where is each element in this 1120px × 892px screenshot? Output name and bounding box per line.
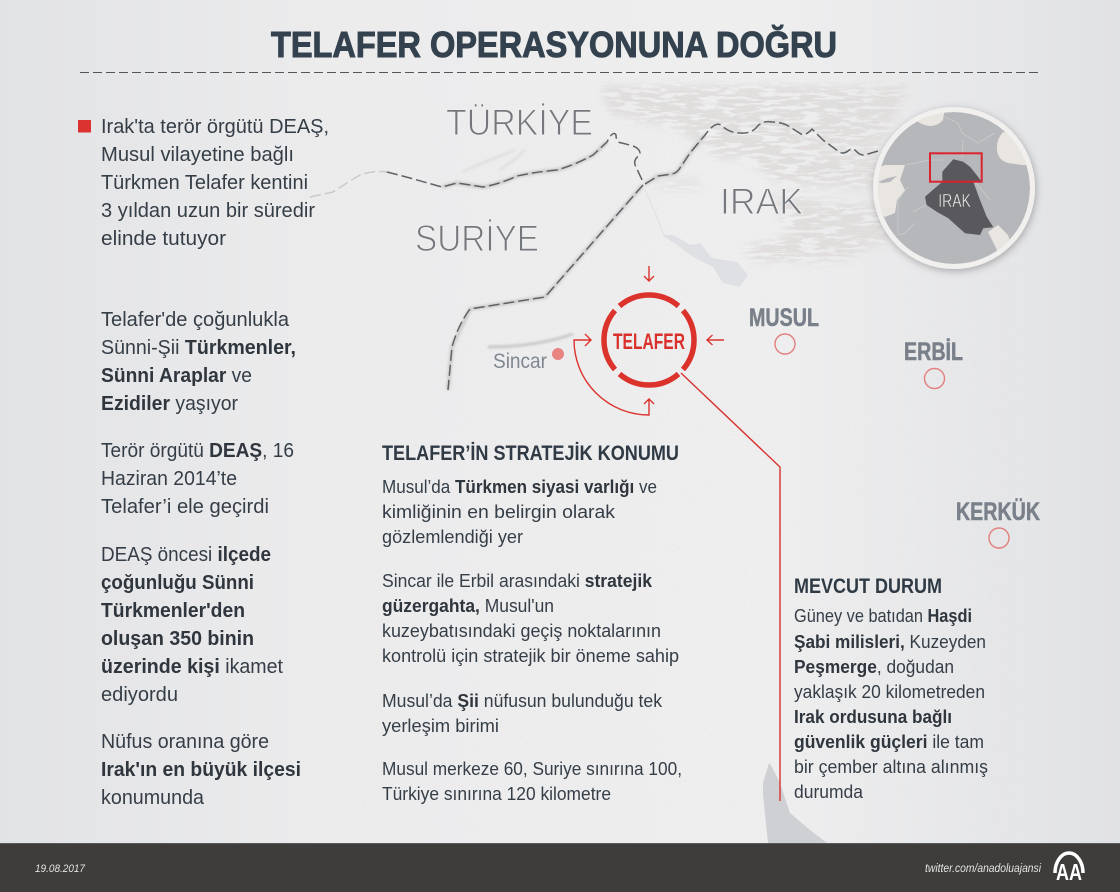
body: bir çember altına alınmış (794, 757, 988, 777)
point 1 (382, 477, 657, 547)
label: Telafer: TELAFER (613, 329, 685, 354)
text block: intro: elinde tutuyor (101, 228, 226, 250)
text block: capture date (101, 440, 294, 518)
text block: intro: 3 yıldan uzun bir süredir (101, 200, 315, 222)
heading: TELAFER’İN STRATEJİK KONUMU (382, 442, 679, 465)
point 2: güzergahta, Musul'un (382, 596, 554, 616)
text block: largest district: Irak'ın en büyük ilçesi (101, 759, 301, 781)
point 1: Musul’da Türkmen siyasi varlığı ve (382, 477, 657, 497)
city: Musul (749, 304, 819, 354)
map: terrain background (310, 85, 1020, 843)
text block: population: Telafer'de çoğunlukla (101, 309, 290, 331)
point 1: kimliğinin en belirgin olarak (382, 502, 616, 522)
text block: pre-DEAŞ population (101, 544, 283, 706)
city: Musul: MUSUL (749, 304, 819, 332)
point 4: Musul merkeze 60, Suriye sınırına 100, (382, 759, 682, 779)
text block: intro: Musul vilayetine bağlı (101, 144, 294, 166)
arrows (574, 266, 724, 415)
icon: Anadolu Agency logo: AA (1056, 859, 1082, 885)
locator rectangle (930, 153, 982, 182)
seas (878, 113, 1026, 250)
inset borders (898, 116, 995, 235)
text block: capture date: Haziran 2014’te (101, 468, 237, 490)
point 1: gözlemlendiği yer (382, 527, 523, 547)
text block: population: Ezidiler yaşıyor (101, 393, 238, 415)
date: 19.08.2017 (35, 863, 86, 875)
map labels: countries: TÜRKİYE (446, 102, 593, 143)
city: Kerkük (956, 497, 1040, 548)
connector line (681, 373, 780, 801)
text block: largest district: Nüfus oranına göre (101, 731, 269, 753)
icon: Anadolu Agency logo (1055, 853, 1083, 885)
borders (310, 122, 878, 390)
footer (0, 843, 1120, 892)
map labels: countries: IRAK (720, 181, 803, 222)
bullet (78, 120, 91, 132)
label: Irak: IRAK (938, 191, 971, 211)
city: Erbil (904, 338, 963, 388)
text block: intro (101, 116, 329, 250)
point 3: Musul’da Şii nüfusun bulunduğu tek (382, 691, 663, 711)
ring (604, 295, 694, 385)
text block: pre-DEAŞ population: üzerinde kişi ikamet (101, 656, 283, 678)
text block: largest district (101, 731, 301, 809)
body: Irak ordusuna bağlı (794, 707, 952, 727)
border shadows (442, 135, 705, 390)
social handle: twitter.com/anadoluajansi (925, 863, 1041, 875)
text block: pre-DEAŞ population: DEAŞ öncesi ilçede (101, 544, 271, 566)
text block: pre-DEAŞ population: çoğunluğu Sünni (101, 572, 254, 594)
text block: pre-DEAŞ population: oluşan 350 binin (101, 628, 254, 650)
point 2: Sincar ile Erbil arasındaki stratejik (382, 571, 653, 591)
body (794, 606, 988, 802)
panel: strategic location (382, 442, 682, 804)
city: Erbil: ERBİL (904, 338, 963, 366)
Cyprus (878, 176, 897, 183)
body: yaklaşık 20 kilometreden (794, 682, 985, 702)
panel: current situation (794, 575, 988, 802)
ridge streaks (462, 150, 573, 347)
point 3: yerleşim birimi (382, 716, 499, 736)
body: Peşmerge, doğudan (794, 657, 954, 677)
text block: largest district: konumunda (101, 787, 205, 809)
text block: population (101, 309, 296, 415)
heading: MEVCUT DURUM (794, 575, 942, 598)
map labels: countries (415, 102, 803, 259)
text block: population: Sünni-Şii Türkmenler, (101, 337, 296, 359)
text block: pre-DEAŞ population: Türkmenler'den (101, 600, 245, 622)
point 4: Türkiye sınırına 120 kilometre (382, 784, 611, 804)
point 4 (382, 759, 682, 804)
Iraq (925, 159, 993, 235)
body: Güney ve batıdan Haşdi (794, 606, 972, 626)
point 2: kontrolü için stratejik bir öneme sahip (382, 646, 679, 666)
body: güvenlik güçleri ile tam (794, 732, 984, 752)
city: Kerkük: KERKÜK (956, 497, 1040, 526)
body: Şabi milisleri, Kuzeyden (794, 632, 986, 652)
text block: pre-DEAŞ population: ediyordu (101, 684, 178, 706)
text block: capture date: Terör örgütü DEAŞ, 16 (101, 440, 294, 462)
body: durumda (794, 782, 864, 802)
map labels: countries: SURİYE (415, 218, 539, 259)
Telafer siege marker (574, 266, 724, 415)
text block: intro: Irak'ta terör örgütü DEAŞ, (101, 116, 329, 138)
point 2 (382, 571, 679, 666)
lake and river (645, 190, 827, 843)
text block: intro: Türkmen Telafer kentini (101, 172, 308, 194)
city: Sincar: Sincar (493, 350, 547, 373)
text block: capture date: Telafer’i ele geçirdi (101, 496, 269, 518)
point 3 (382, 691, 663, 736)
title: TELAFER OPERASYONUNA DOĞRU (271, 24, 837, 65)
inset locator map (870, 107, 1035, 269)
point 2: kuzeybatısındaki geçiş noktalarının (382, 621, 661, 641)
text block: population: Sünni Araplar ve (101, 365, 252, 387)
